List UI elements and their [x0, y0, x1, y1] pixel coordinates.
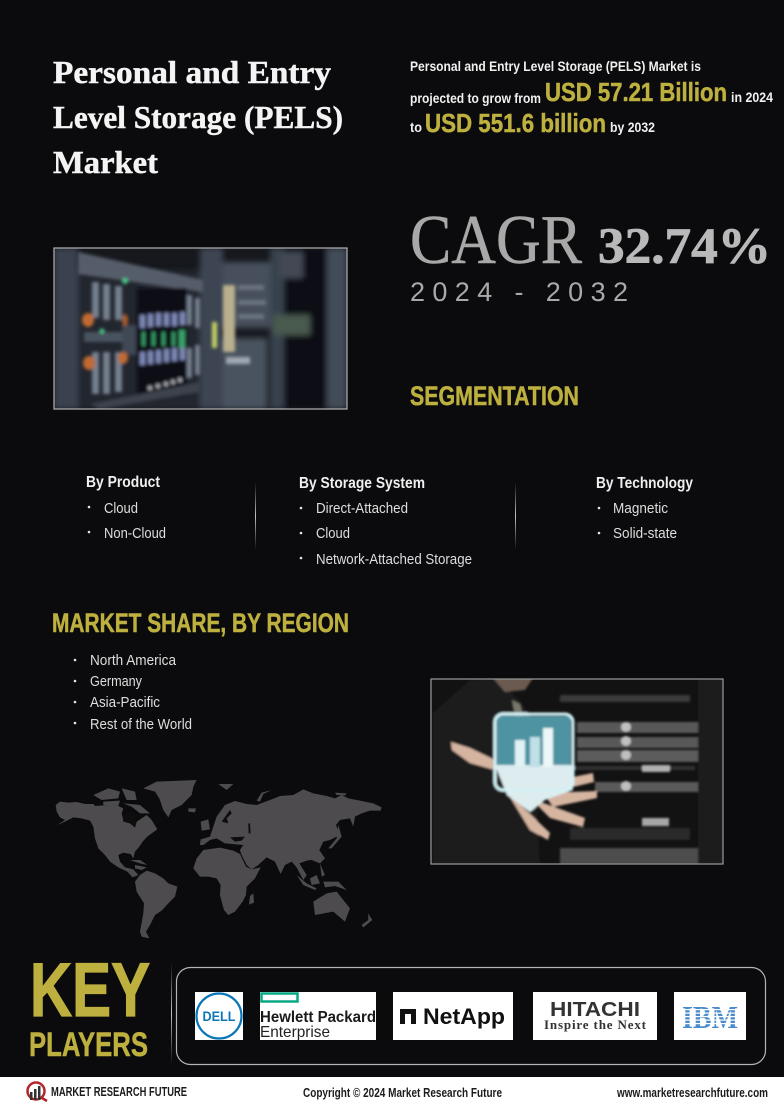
heading: key players — [29, 948, 150, 1064]
logo: Hitachi — [533, 992, 657, 1040]
market forecast text — [410, 58, 773, 138]
segment: by technology: Magnetic — [613, 500, 668, 517]
segment: by storage system: Network-Attached Storage — [316, 551, 472, 568]
logo: Dell: DELL — [202, 1008, 236, 1024]
segment: by storage system: By Storage System — [299, 475, 425, 492]
photo: server rack — [54, 248, 347, 409]
market forecast text: in 2024 — [731, 89, 773, 105]
CAGR figure: 32.74% — [598, 219, 771, 275]
region list: North America — [90, 652, 177, 669]
logo: NetApp — [393, 992, 513, 1040]
heading: key players: KEY — [30, 948, 150, 1033]
logo: Hewlett Packard Enterprise: Hewlett Packard — [260, 1009, 376, 1026]
logo: Hewlett Packard Enterprise: Enterprise — [260, 1024, 330, 1041]
segment: by product: By Product — [86, 474, 161, 491]
logo: Hitachi: Inspire the Next — [544, 1017, 647, 1032]
CAGR figure — [410, 202, 771, 307]
region list: Rest of the World — [90, 716, 192, 733]
logo: IBM — [674, 992, 746, 1040]
segment: by product: Cloud — [104, 500, 138, 517]
logo: NetApp: NetApp — [423, 1004, 505, 1029]
title: Market — [53, 144, 158, 180]
region list: Asia-Pacific — [90, 694, 160, 711]
market forecast text: USD 551.6 billion — [425, 108, 606, 138]
CAGR figure: CAGR — [410, 202, 582, 279]
footer: MARKET RESEARCH FUTURE — [51, 1084, 187, 1099]
title: Level Storage (PELS) — [53, 99, 343, 135]
market forecast text: projected to grow from — [410, 90, 541, 106]
segment: by product: Non-Cloud — [104, 525, 166, 542]
key players panel — [176, 968, 766, 1064]
heading: segmentation: SEGMENTATION — [410, 381, 579, 411]
heading: market share by region: MARKET SHARE, BY REGION — [52, 608, 349, 638]
title — [53, 54, 343, 180]
footer — [0, 1077, 784, 1108]
photo: hand with chart icon — [431, 678, 723, 864]
heading: key players: PLAYERS — [29, 1026, 148, 1064]
region list — [74, 652, 192, 733]
market forecast text: USD 57.21 Billion — [545, 77, 727, 107]
segment: by storage system: Direct-Attached — [316, 500, 408, 517]
logo: Hewlett Packard Enterprise — [260, 992, 376, 1041]
segment: by storage system: Cloud — [316, 525, 350, 542]
world map — [56, 780, 382, 938]
segment: by storage system — [299, 475, 472, 568]
logo: Dell — [195, 992, 243, 1040]
logo: Hitachi: HITACHI — [550, 999, 640, 1021]
icon: market research future logo — [28, 1082, 47, 1101]
market forecast text: to — [410, 119, 422, 135]
region list: Germany — [90, 673, 142, 690]
CAGR figure: 2024 - 2032 — [410, 277, 628, 307]
footer: Copyright © 2024 Market Research Future — [303, 1086, 502, 1100]
segment: by technology: Solid-state — [613, 525, 677, 542]
market forecast text: by 2032 — [610, 119, 655, 135]
segment: by technology: By Technology — [596, 475, 693, 492]
title: Personal and Entry — [53, 54, 331, 90]
segment: by technology — [596, 475, 693, 542]
logo: IBM: IBM — [682, 999, 738, 1035]
segment: by product — [86, 474, 166, 542]
market forecast text: Personal and Entry Level Storage (PELS) Market is — [410, 58, 701, 74]
